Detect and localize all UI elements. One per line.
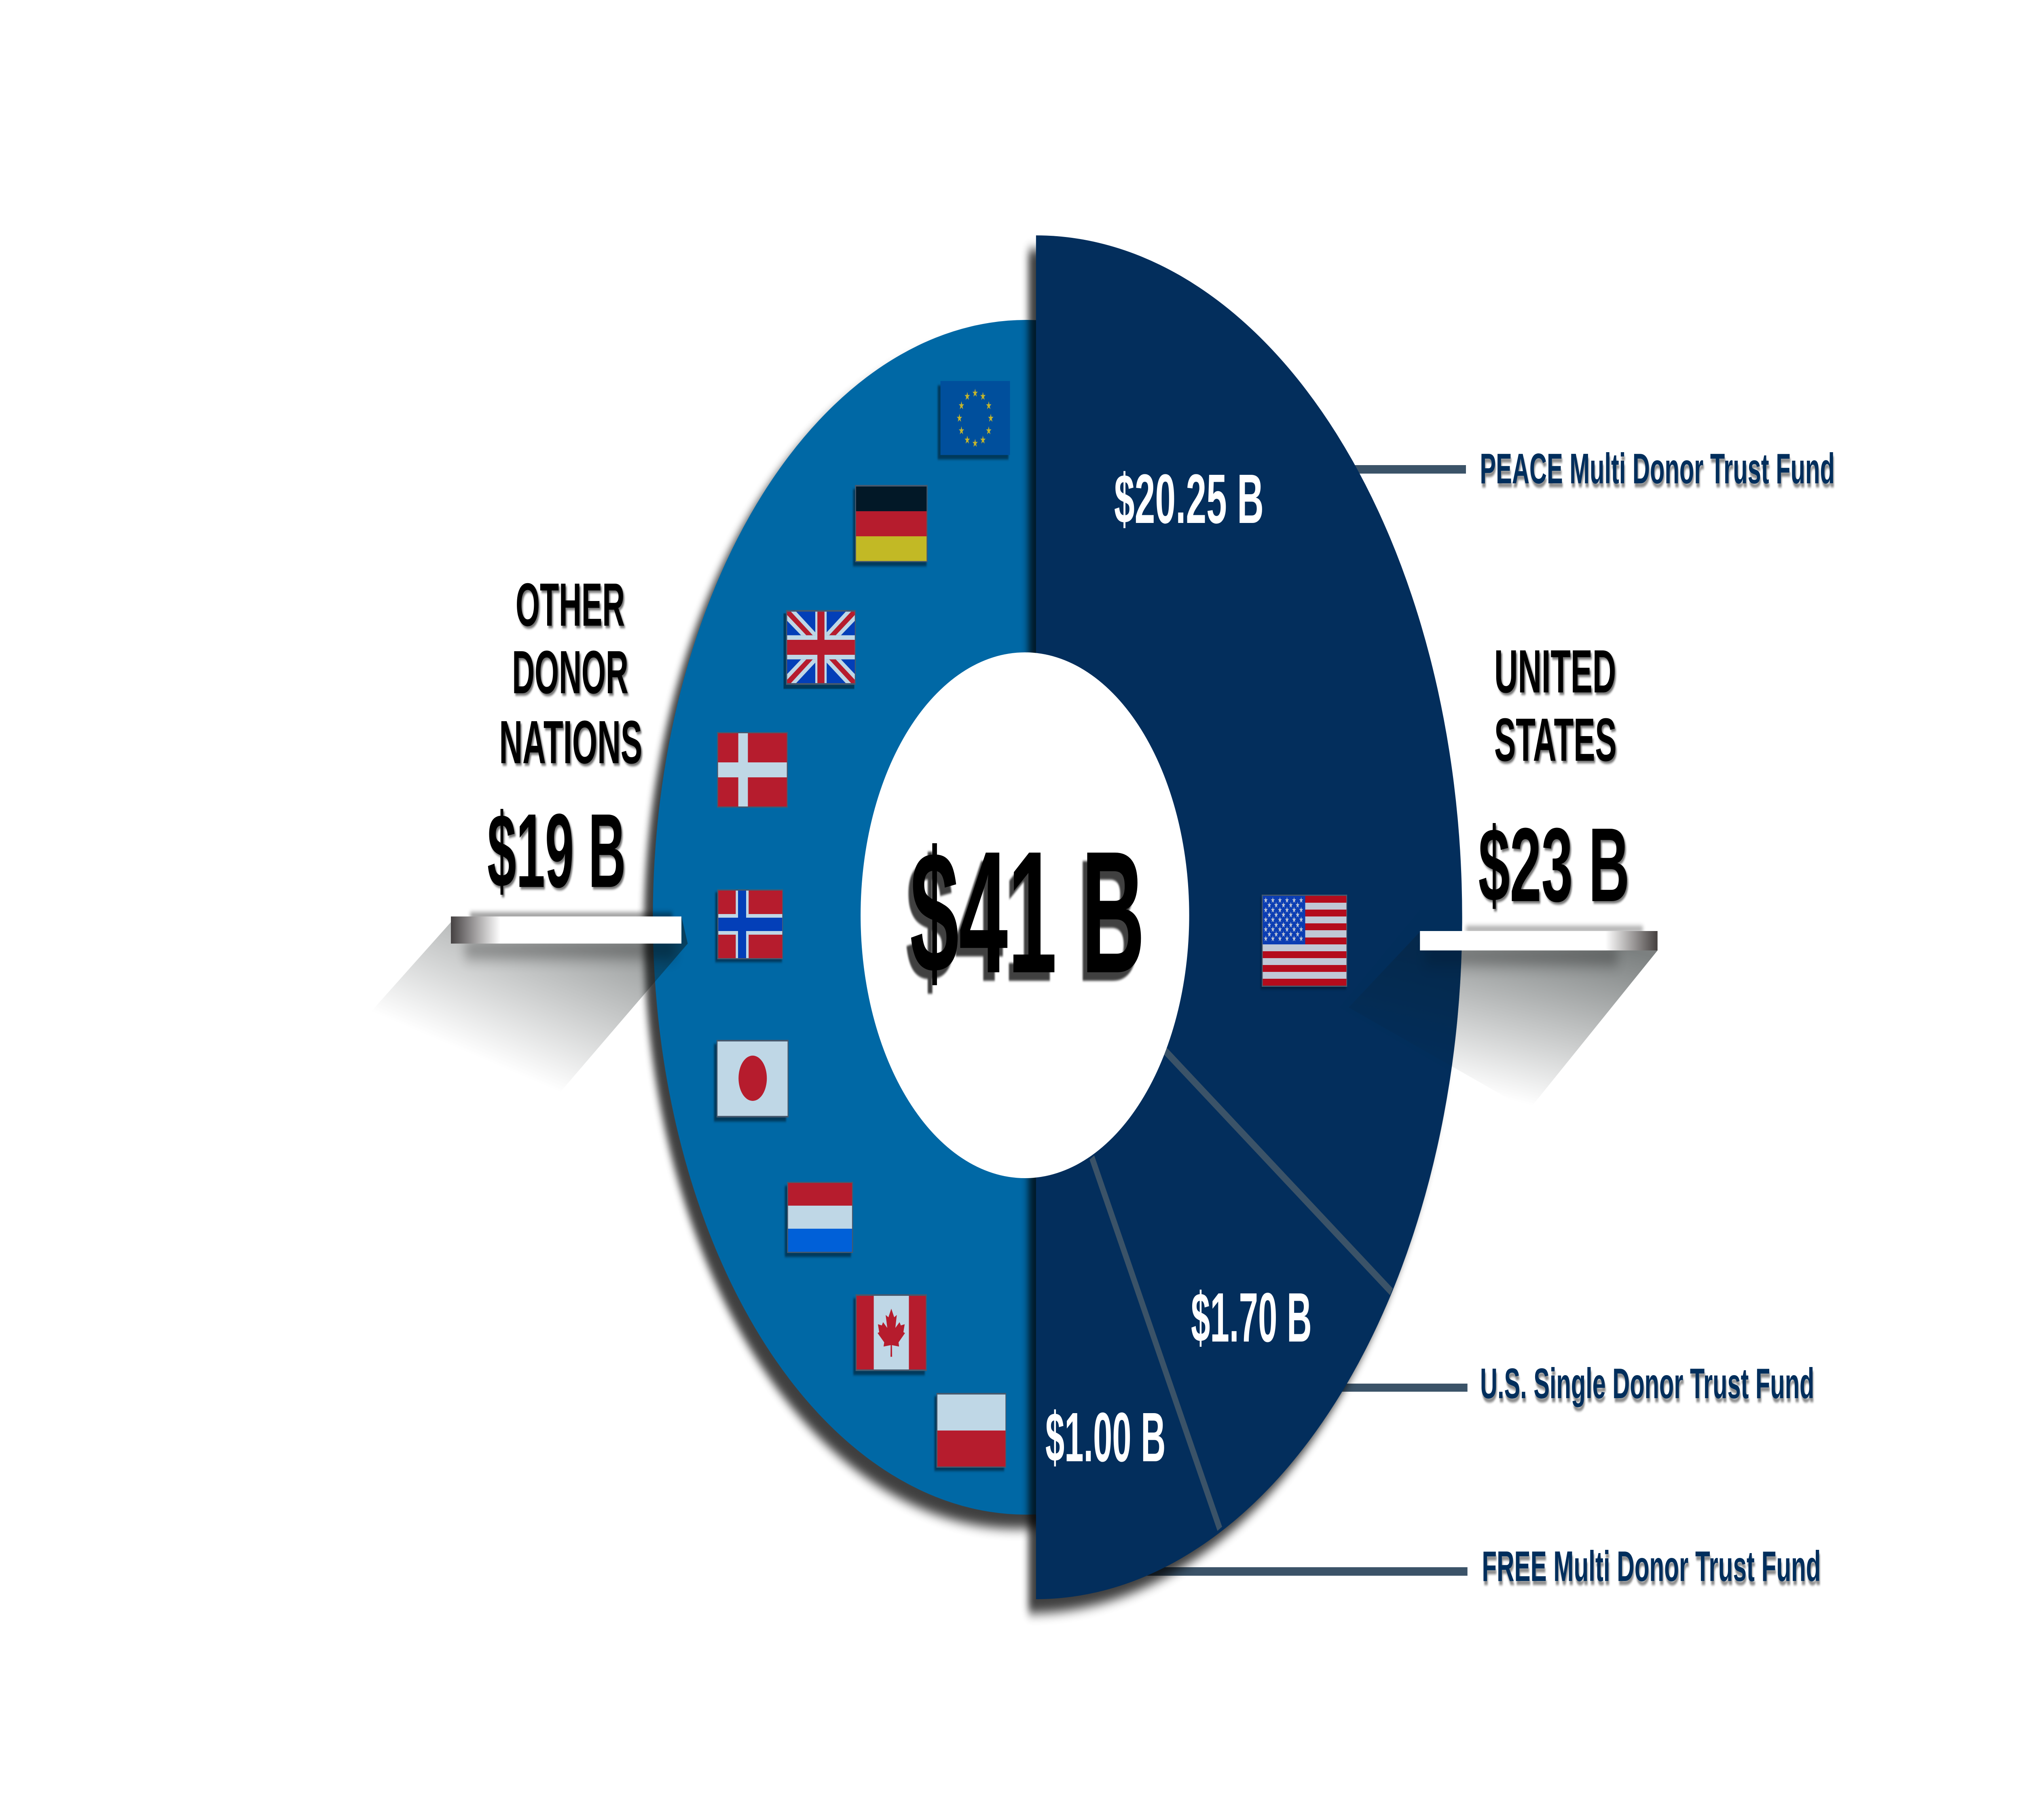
label: U.S. Single Donor Trust Fund: U.S. Single Donor Trust Fund xyxy=(1480,1359,1814,1407)
flags of other donor nations xyxy=(714,381,1010,1471)
heading: other donor nations: OTHER xyxy=(516,570,625,639)
total amount: $41 B xyxy=(910,815,1145,1009)
flag: European Union xyxy=(938,381,1010,459)
amount: other donors: $19 B xyxy=(487,792,626,909)
flag: Poland xyxy=(935,1393,1006,1471)
center hole xyxy=(861,652,1189,1178)
flag: Germany xyxy=(853,485,928,566)
left shelf cast shadow xyxy=(361,913,688,1122)
segment divider: FREE fund xyxy=(1092,1158,1220,1529)
segment divider: single donor fund xyxy=(1153,1037,1392,1292)
heading: United States xyxy=(1494,637,1617,774)
segment value: single donor fund: $1.70 B xyxy=(1191,1278,1312,1357)
label: FREE Multi Donor Trust Fund: FREE Multi Donor Trust Fund xyxy=(1482,1542,1821,1590)
donut right half: United States xyxy=(1028,235,1462,1613)
segment value: FREE fund: $1.00 B xyxy=(1045,1398,1166,1476)
left shelf bar xyxy=(451,916,681,944)
amount: United States: $23 B xyxy=(1478,806,1629,923)
flag: Netherlands xyxy=(785,1182,853,1257)
segment value: PEACE fund: $20.25 B xyxy=(1114,459,1264,538)
right shelf cast shadow xyxy=(1356,910,1658,1096)
infographic canvas xyxy=(381,235,1835,1622)
donut left half: other donors xyxy=(644,320,1400,1529)
flag: Canada xyxy=(853,1294,927,1375)
flag: Denmark xyxy=(717,732,788,808)
flag: United States xyxy=(1261,895,1347,989)
heading: other donor nations: NATIONS xyxy=(499,708,642,776)
flag: United Kingdom xyxy=(783,610,856,689)
right shelf bar xyxy=(1420,931,1658,950)
heading: other donor nations: DONOR xyxy=(512,638,628,706)
heading: United States: UNITED xyxy=(1494,637,1616,705)
heading: United States: STATES xyxy=(1494,705,1617,774)
leader lines xyxy=(1137,465,1468,1576)
heading: other donor nations xyxy=(499,570,642,776)
flag: Japan xyxy=(714,1040,789,1122)
label: PEACE Multi Donor Trust Fund: PEACE Multi Donor Trust Fund xyxy=(1480,444,1835,493)
flag: Norway xyxy=(715,889,783,962)
